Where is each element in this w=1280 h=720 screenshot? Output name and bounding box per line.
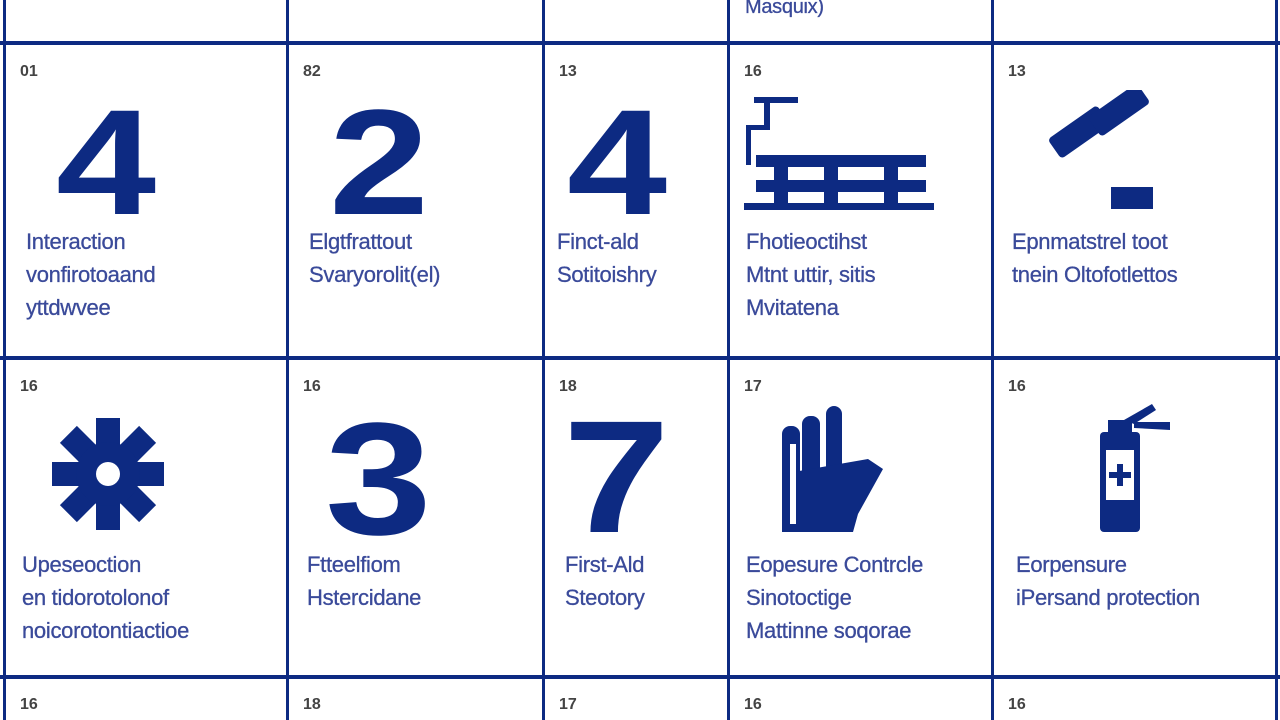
label: Upeseoction: [22, 552, 141, 577]
icon: star: [52, 418, 164, 530]
panel: cell 10: 16: [1008, 378, 1026, 395]
panel: cell 5: 13: [1008, 63, 1026, 80]
label: Ftteelfiom: [307, 552, 401, 577]
panel: cell 3: [557, 63, 667, 287]
text: 18: [303, 696, 321, 713]
panel: cell 8: 18: [559, 378, 577, 395]
big number 4: 4: [567, 78, 667, 246]
label: tnein Oltofotlettos: [1012, 262, 1178, 287]
text: 16: [744, 696, 762, 713]
panel: cell 7: [303, 378, 432, 610]
label: Mtnt uttir, sitis: [746, 262, 875, 287]
label: [746, 552, 923, 643]
label: Elgtfrattout: [309, 229, 412, 254]
label: Eopesure Contrcle: [746, 552, 923, 577]
label: [557, 229, 657, 287]
label: Interaction: [26, 229, 125, 254]
label: Sinotoctige: [746, 585, 852, 610]
label: Hstercidane: [307, 585, 421, 610]
panel: cell 5: [1008, 63, 1178, 287]
label: [1016, 552, 1200, 610]
label: yttdwvee: [26, 295, 110, 320]
label: Epnmatstrel toot: [1012, 229, 1167, 254]
label: vonfirotoaand: [26, 262, 155, 287]
panel: cell 2: [303, 63, 440, 287]
label: [307, 552, 421, 610]
text: 17: [559, 696, 577, 713]
big number 3: 3: [325, 389, 432, 568]
label: Mvitatena: [746, 295, 839, 320]
label: iPersand protection: [1016, 585, 1200, 610]
panel: cell 7: 16: [303, 378, 321, 395]
panel: cell 1: [20, 63, 156, 320]
label: en tidorotolonof: [22, 585, 169, 610]
panel: cell 8: [559, 378, 670, 610]
bottom row numbers: 16: [20, 696, 38, 713]
panel: cell 4: 16: [744, 63, 762, 80]
label: [1012, 229, 1178, 287]
icon: tool: [1049, 90, 1153, 209]
text: 16: [1008, 696, 1026, 713]
label: Finct-ald: [557, 229, 639, 254]
panel: cell 2: 82: [303, 63, 321, 80]
icon: glove: [782, 406, 883, 532]
label: Fhotieoctihst: [746, 229, 867, 254]
label: First-Ald: [565, 552, 644, 577]
label: Steotory: [565, 585, 645, 610]
label: [309, 229, 440, 287]
big number 7: 7: [563, 387, 670, 566]
big number 4: 4: [56, 78, 156, 246]
label: Eorpensure: [1016, 552, 1127, 577]
panel: cell 1: 01: [20, 63, 38, 80]
label: Mattinne soqorae: [746, 618, 911, 643]
label: [26, 229, 155, 320]
panel: cell 6: [20, 378, 189, 643]
panel: cell 3: 13: [559, 63, 577, 80]
panel: cell 4: [744, 63, 934, 320]
panel: cell 6: 16: [20, 378, 38, 395]
label: [746, 229, 875, 320]
icon: extinguisher: [1100, 404, 1170, 532]
label: Svaryorolit(el): [309, 262, 440, 287]
panel: cell 9: 17: [744, 378, 762, 395]
label: [565, 552, 645, 610]
icon: machine: [744, 97, 934, 210]
label: noicorotontiactioe: [22, 618, 189, 643]
panel: cell 9: [744, 378, 923, 643]
label: [22, 552, 189, 643]
panel: cell 10: [1008, 378, 1200, 610]
label: Sotitoishry: [557, 262, 656, 287]
big number 2: 2: [329, 78, 429, 246]
